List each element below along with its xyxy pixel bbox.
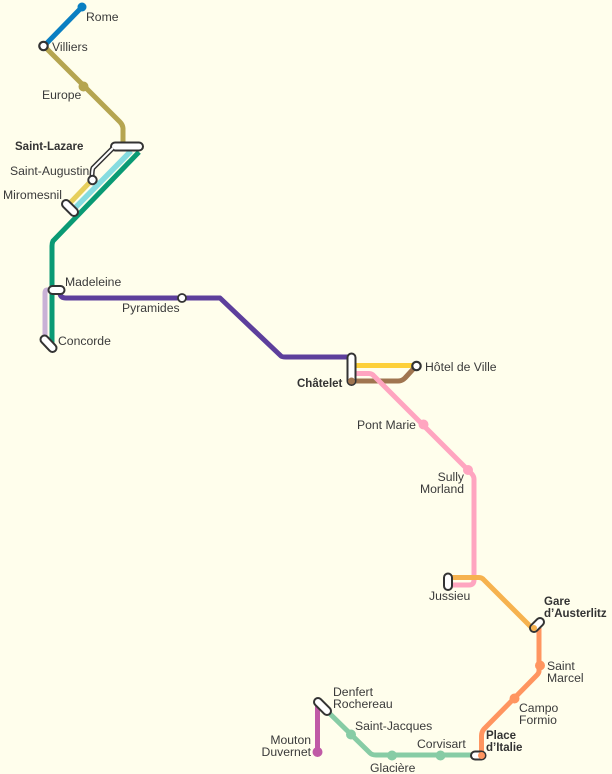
label: Place d'Italie: d’Italie: [486, 742, 522, 754]
station: Concorde: [44, 340, 52, 348]
label: Gare d'Austerlitz: Gare: [544, 596, 570, 608]
station: Villiers: [39, 42, 48, 50]
label: Concorde: Concorde: [58, 334, 111, 348]
label: Pont Marie: Pont Marie: [357, 418, 416, 432]
label: Sully Morland: Sully: [438, 470, 464, 484]
line: yellow Chatelet to Hotel de Ville: [352, 363, 416, 368]
label: Mouton Duvernet: Duvernet: [262, 745, 312, 759]
station: Madeleine: [52, 285, 60, 295]
line: brown Chatelet to Hotel de Ville: [351, 366, 416, 381]
station: Gare d'Austerlitz: [531, 622, 540, 631]
station: Corvisart: [436, 750, 446, 760]
label: Denfert Rochereau: Denfert: [333, 685, 373, 699]
line: light blue: [74, 151, 131, 209]
label: Europe: Europe: [42, 88, 82, 102]
label: Corvisart: Corvisart: [417, 737, 466, 751]
label: Saint-Jacques: Saint-Jacques: [355, 719, 432, 733]
label: Chatelet: Châtelet: [297, 378, 343, 390]
connector: Saint-Lazare to Saint-Augustin: [92, 148, 113, 178]
label: Campo Formio: Campo: [519, 701, 558, 715]
station: Miromesnil: [66, 204, 74, 212]
station: Jussieu: [443, 578, 453, 586]
line: pink Chatelet to Jussieu: [352, 374, 474, 585]
label: Place d'Italie: Place: [486, 730, 516, 742]
station: Mouton Duvernet: [312, 747, 322, 757]
station: Pont Marie: [418, 420, 428, 430]
label: Mouton Duvernet: Mouton: [270, 733, 311, 747]
line: purple Madeleine to Chatelet: [60, 294, 350, 357]
label: Sully Morland: Morland: [420, 482, 464, 496]
label: Hotel de Ville: Hôtel de Ville: [425, 360, 497, 374]
label: Villiers: Villiers: [52, 40, 88, 54]
station: Saint-Jacques: [346, 730, 356, 740]
label: Miromesnil: Miromesnil: [3, 188, 62, 202]
station: Saint-Lazare: [115, 142, 139, 152]
station: Sully Morland: [463, 465, 473, 475]
label: Saint-Augustin: Saint-Augustin: [10, 164, 89, 178]
label: Madeleine: Madeleine: [65, 275, 121, 289]
station: Saint Marcel: [535, 660, 545, 670]
station: Hotel de Ville: [412, 362, 421, 370]
label: Saint-Lazare: Saint-Lazare: [15, 141, 83, 153]
station: Glaciere: [387, 750, 397, 760]
station: Pyramides: [178, 294, 186, 302]
label: Saint Marcel: Saint: [547, 659, 575, 673]
label: Gare d'Austerlitz: d’Austerlitz: [544, 608, 607, 620]
line: lilac: [45, 290, 50, 340]
line: magenta Denfert to Mouton Duvernet: [315, 705, 320, 752]
station: Campo Formio: [510, 694, 520, 704]
label: Jussieu: Jussieu: [429, 589, 470, 603]
line: green Saint-Lazare to Concorde: [52, 152, 139, 345]
line: mint Denfert to Place d'Italie: [323, 707, 476, 755]
label: Rome: Rome: [86, 10, 119, 24]
line: yellow Saint-Augustin to Miromesnil: [69, 180, 92, 204]
label: Pyramides: Pyramides: [122, 301, 180, 315]
line: blue Rome to Villiers: [44, 2, 86, 46]
label: Campo Formio: Formio: [519, 713, 557, 727]
station: Saint-Augustin: [88, 176, 97, 184]
station: Denfert Rochereau: [318, 702, 327, 711]
line: orange Austerlitz to Place d'Italie: [482, 628, 539, 755]
label: Saint Marcel: Marcel: [547, 671, 584, 685]
label: Denfert Rochereau: Rochereau: [333, 697, 393, 711]
station: Chatelet: [348, 358, 355, 384]
line: olive Villiers to Saint-Lazare: [44, 46, 123, 144]
station: Place d'Italie: [475, 752, 485, 759]
line: amber Jussieu to Austerlitz: [450, 578, 534, 630]
